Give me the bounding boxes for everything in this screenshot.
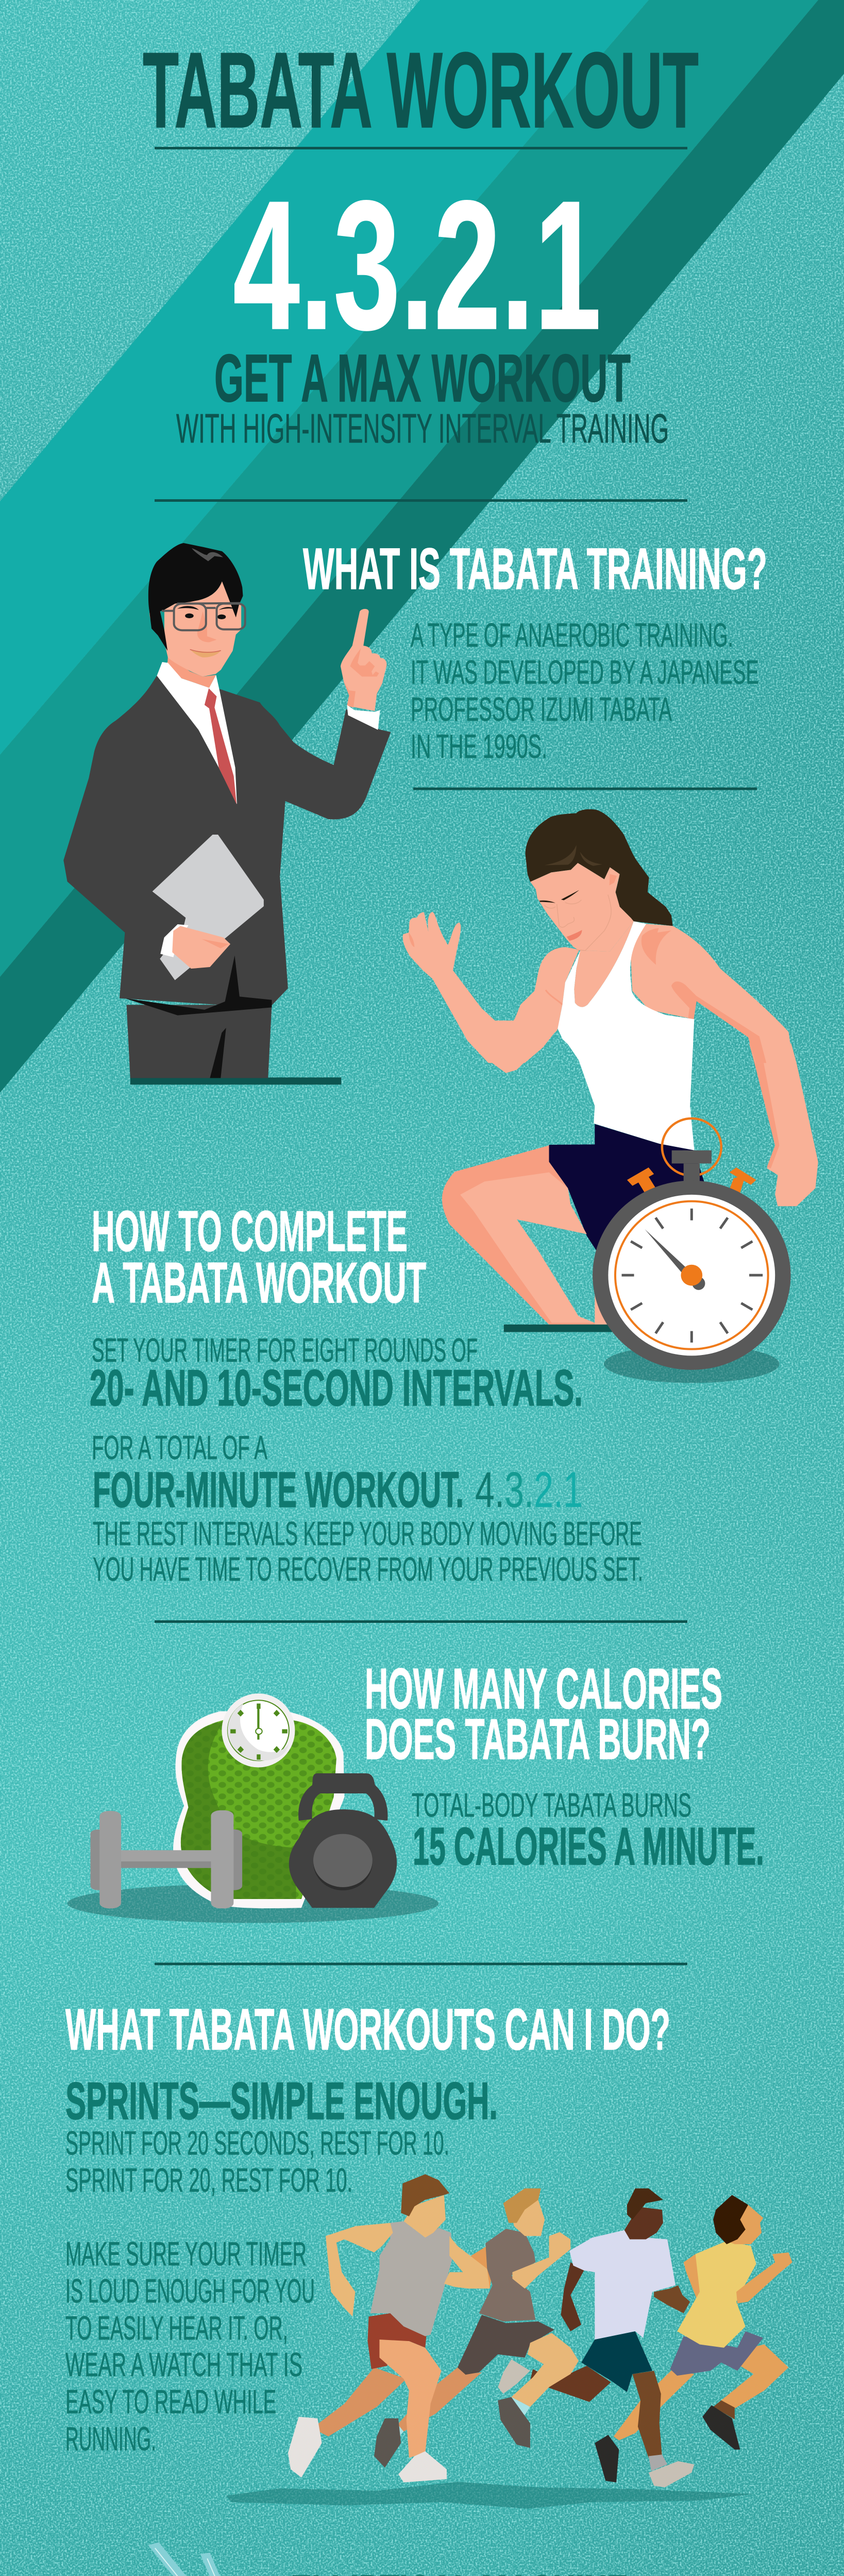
tablet	[153, 835, 264, 980]
handles	[148, 2542, 225, 2576]
trousers	[126, 1005, 272, 1078]
subtitle	[176, 340, 669, 451]
text: definition	[411, 616, 759, 765]
text: sprints	[65, 2072, 498, 2199]
lower arm on left	[463, 1021, 560, 1073]
heading: how to complete	[92, 1199, 426, 1315]
text: timer advice: MAKE SURE YOUR TIMER	[65, 2235, 307, 2273]
diagonal stripes	[0, 0, 844, 1093]
heading: how to complete: A TABATA WORKOUT	[92, 1251, 426, 1315]
nose and mouth	[197, 612, 217, 642]
text: how to complete: 4.3.2.1	[475, 1462, 583, 1518]
glasses	[162, 603, 245, 630]
text: timer advice: WEAR A WATCH THAT IS	[65, 2346, 302, 2383]
hand	[645, 1229, 689, 1274]
crown	[672, 1150, 712, 1163]
raised hand	[341, 609, 386, 711]
shadow	[604, 1345, 780, 1383]
text: timer advice: TO EASILY HEAR IT. OR,	[65, 2309, 288, 2347]
suit jacket	[63, 675, 391, 1008]
lower tank	[565, 1040, 695, 1150]
face	[530, 863, 634, 952]
lower right arm	[749, 1044, 818, 1206]
shirt and tie	[157, 662, 237, 804]
eyes and brows	[177, 606, 236, 610]
case and face	[593, 1180, 791, 1370]
text: how to complete	[90, 1331, 643, 1588]
hand and left arm	[403, 912, 579, 1063]
orange loop	[662, 1118, 721, 1176]
leg	[442, 1145, 614, 1325]
side buttons	[638, 1177, 658, 1195]
text: sprints: SPRINT FOR 20, REST FOR 10.	[65, 2161, 352, 2199]
text: timer advice	[65, 2235, 315, 2458]
illustration: elliptical machine	[52, 2542, 353, 2576]
floor strip	[504, 1325, 614, 1332]
runner 4	[595, 2195, 792, 2482]
hair	[148, 543, 243, 651]
text: how to complete: FOUR-MINUTE WORKOUT.	[93, 1462, 464, 1518]
heading: how many calories	[365, 1657, 722, 1771]
text: how to complete: SET YOUR TIMER FOR EIGHT ROUNDS OF	[92, 1331, 478, 1369]
text: how to complete: FOR A TOTAL OF A	[92, 1429, 267, 1466]
chest	[574, 921, 634, 1007]
scale dial	[222, 1693, 295, 1767]
text: calories	[412, 1786, 764, 1876]
floor strip	[130, 1077, 341, 1084]
text: definition: PROFESSOR IZUMI TABATA	[411, 690, 672, 728]
text: timer advice: EASY TO READ WHILE	[65, 2383, 276, 2420]
illustration: runners	[226, 2174, 792, 2509]
shoulder and right arm	[631, 921, 793, 1063]
heading: how to complete: HOW TO COMPLETE	[92, 1199, 408, 1263]
face	[164, 581, 241, 676]
bathroom scale	[173, 1711, 345, 1908]
ground shadow	[226, 2482, 753, 2509]
ear and neck	[149, 609, 163, 635]
illustration: stopwatch	[593, 1118, 791, 1383]
text: sprints: SPRINT FOR 20 SECONDS, REST FOR 10.	[65, 2124, 449, 2162]
shadow	[67, 1884, 438, 1923]
text: timer advice: RUNNING.	[65, 2420, 156, 2458]
illustration: scale, dumbbell and kettlebell	[67, 1693, 438, 1923]
kettlebell	[298, 1773, 387, 1821]
text: timer advice: IS LOUD ENOUGH FOR YOU	[65, 2272, 315, 2310]
text: definition: IN THE 1990S.	[411, 727, 547, 765]
ticks	[622, 1209, 763, 1343]
runner 3	[530, 2189, 695, 2487]
text: sprints: SPRINTS—SIMPLE ENOUGH.	[65, 2072, 498, 2130]
headline number: 4.3.2.1	[233, 162, 601, 368]
tank top	[558, 921, 694, 1063]
dumbbell	[90, 1810, 242, 1908]
runner 2	[374, 2189, 579, 2468]
lower hand	[160, 924, 189, 957]
hair	[525, 809, 673, 926]
shorts	[549, 1124, 705, 1250]
runner 1	[288, 2174, 490, 2482]
illustration: woman athlete	[403, 809, 818, 1332]
illustration: professor	[63, 543, 391, 1084]
